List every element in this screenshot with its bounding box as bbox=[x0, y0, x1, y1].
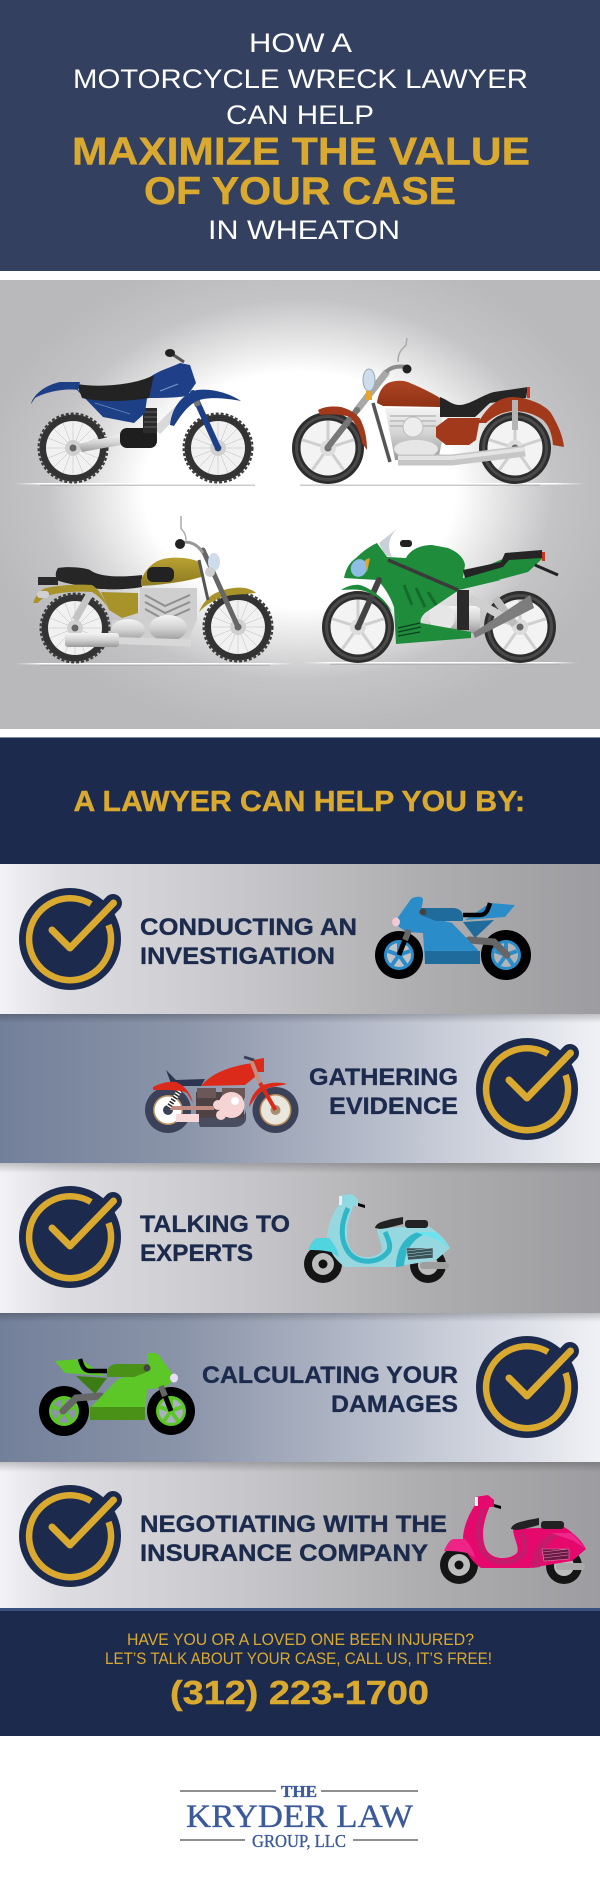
text: gathering evidence bbox=[309, 1064, 458, 1120]
icon: green sport bike bbox=[322, 528, 558, 663]
panel: hero motorcycles bbox=[0, 280, 600, 729]
panel: gathering evidence bbox=[0, 1014, 600, 1163]
text: conducting an investigation bbox=[140, 914, 357, 970]
title: OF YOUR CASE bbox=[144, 170, 456, 213]
panel: section heading band bbox=[0, 737, 600, 864]
title: MAXIMIZE THE VALUE bbox=[72, 130, 530, 174]
text: calculating your damages bbox=[202, 1362, 458, 1418]
icon: check badge bbox=[476, 1336, 578, 1438]
text: gathering evidence: GATHERING bbox=[309, 1064, 458, 1091]
text: talking to experts: TALKING TO bbox=[140, 1211, 290, 1238]
logo: the kryder law group: KRYDER LAW bbox=[186, 1799, 414, 1835]
icon: teal scooter bbox=[304, 1194, 450, 1283]
text: call to action: LET’S TALK ABOUT YOUR CASE, CALL US, IT’S FREE! bbox=[105, 1650, 492, 1668]
icon: check badge bbox=[19, 1485, 121, 1587]
text: gathering evidence: EVIDENCE bbox=[329, 1093, 458, 1120]
text: talking to experts: EXPERTS bbox=[140, 1240, 253, 1267]
logo: the kryder law group: THE bbox=[281, 1782, 317, 1801]
icon: check badge bbox=[19, 888, 121, 990]
panel: call to action bbox=[0, 1611, 600, 1736]
text: calculating your damages: DAMAGES bbox=[331, 1391, 458, 1418]
text: talking to experts bbox=[140, 1211, 290, 1267]
text: conducting an investigation: CONDUCTING AN bbox=[140, 914, 357, 941]
title: HOW A bbox=[249, 28, 352, 58]
text: conducting an investigation: INVESTIGATION bbox=[140, 943, 335, 970]
panel: calculating your damages bbox=[0, 1313, 600, 1462]
logo: the kryder law group bbox=[180, 1782, 418, 1851]
text: negotiating with the insurance company: NEGOTIATING WITH THE bbox=[140, 1511, 447, 1538]
icon: check badge bbox=[476, 1038, 578, 1140]
text: negotiating with the insurance company: INSURANCE COMPANY bbox=[140, 1540, 428, 1567]
title: MOTORCYCLE WRECK LAWYER bbox=[73, 64, 528, 94]
icon: pink scooter bbox=[440, 1495, 586, 1584]
icon: red chopper bbox=[292, 338, 564, 484]
icon: check badge bbox=[19, 1186, 121, 1288]
text: calculating your damages: CALCULATING YOUR bbox=[202, 1362, 458, 1389]
panel: negotiating with the insurance company bbox=[0, 1462, 600, 1611]
title: CAN HELP bbox=[226, 100, 374, 130]
title bbox=[72, 28, 530, 245]
panel: talking to experts bbox=[0, 1163, 600, 1313]
icon: gold cafe bike bbox=[33, 516, 272, 662]
icon: blue sport bike bbox=[375, 897, 531, 980]
icon: green sport bike bbox=[39, 1353, 195, 1436]
text: call to action bbox=[105, 1631, 492, 1668]
text: negotiating with the insurance company bbox=[140, 1511, 447, 1567]
icon: blue dirt bike bbox=[31, 349, 252, 482]
heading: a lawyer can help: A LAWYER CAN HELP YOU BY: bbox=[74, 786, 525, 818]
icon: red cafe motorcycle bbox=[145, 1057, 298, 1133]
title: IN WHEATON bbox=[208, 215, 400, 245]
header panel bbox=[0, 0, 600, 271]
phone number: (312) 223-1700 bbox=[170, 1674, 429, 1711]
panel: conducting an investigation bbox=[0, 864, 600, 1014]
text: call to action: HAVE YOU OR A LOVED ONE BEEN INJURED? bbox=[127, 1631, 474, 1649]
logo: the kryder law group: GROUP, LLC bbox=[252, 1831, 346, 1851]
